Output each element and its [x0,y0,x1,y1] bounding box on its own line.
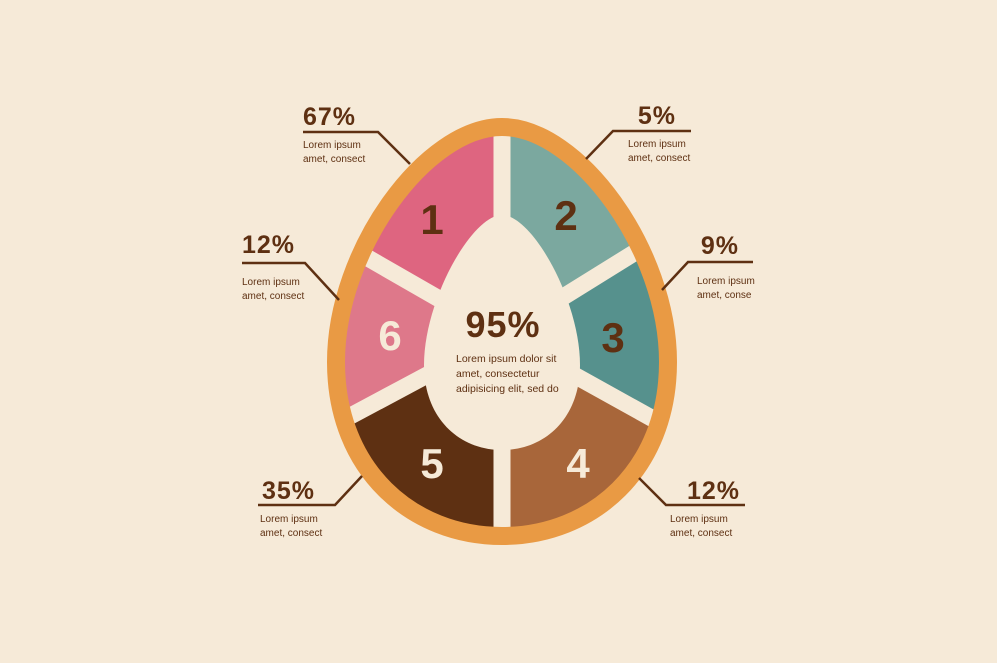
segment 6 [345,266,434,407]
callout 1: amet, consect [303,154,365,165]
segment numbers: 6 [378,312,402,359]
callout 2: amet, consect [628,153,690,164]
center text [456,304,559,395]
segment 3 [568,262,659,410]
segment 1 [372,136,494,290]
segment numbers: 2 [554,192,578,239]
callout 1 [303,103,410,165]
callout 4: 12% [687,477,740,505]
callout 5 [258,476,362,539]
segment 4 [510,386,648,527]
callout 3 [662,232,755,301]
orange ring [336,127,668,536]
callout 6: Lorem ipsum [242,277,300,288]
callout 6: 12% [242,231,295,259]
callout 4: Lorem ipsum [670,514,728,525]
center text: adipisicing elit, sed do [456,383,559,395]
callout 4: amet, consect [670,528,732,539]
center text: amet, consectetur [456,368,540,380]
callout 5: amet, consect [260,528,322,539]
segment 2 [510,136,630,288]
callout 2: 5% [638,102,676,130]
center text: 95% [465,304,541,345]
egg diagram [327,118,677,545]
callout 5: Lorem ipsum [260,514,318,525]
segment numbers: 4 [566,440,590,487]
callout 6: amet, consect [242,291,304,302]
segment numbers: 5 [420,440,444,487]
segment numbers: 1 [420,196,444,243]
callout 3: amet, conse [697,290,752,301]
segments [345,136,659,527]
callout 2: Lorem ipsum [628,139,686,150]
segment 5 [354,385,494,527]
callout 4 [639,477,745,539]
callout 5: 35% [262,477,315,505]
callout 6 [242,231,339,302]
callout 3: Lorem ipsum [697,276,755,287]
callout 2 [586,102,691,164]
segment numbers [378,192,625,487]
callout 1: Lorem ipsum [303,140,361,151]
callout 3: 9% [701,232,739,260]
callout 1: 67% [303,103,356,131]
center text: Lorem ipsum dolor sit [456,353,556,365]
segment numbers: 3 [601,314,625,361]
